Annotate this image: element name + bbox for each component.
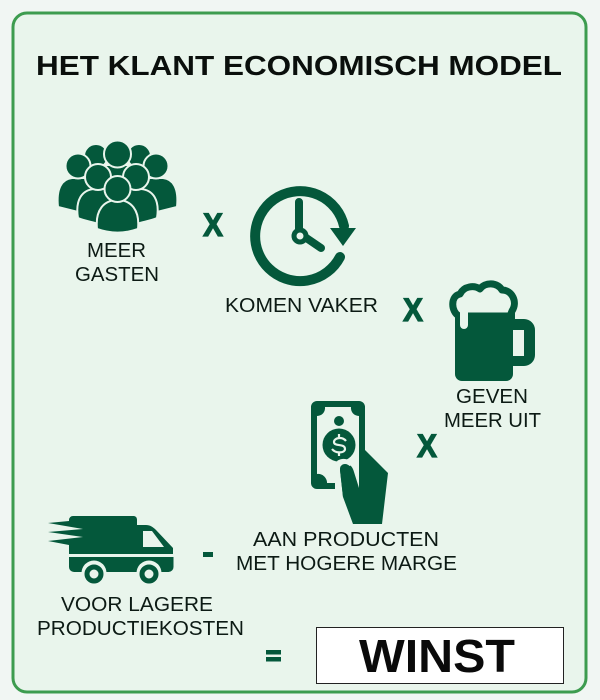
title: HET KLANT ECONOMISCH MODEL [36, 50, 562, 81]
label: aan producten met hogere marge: AAN PRODUCTEN [253, 529, 439, 551]
label: geven meer uit: MEER UIT [444, 410, 541, 432]
icon: beer mug [453, 284, 535, 381]
label: geven meer uit: GEVEN [456, 386, 528, 408]
operator: equals [266, 650, 281, 662]
label: meer gasten [75, 240, 159, 286]
operator: times 1: X [203, 207, 224, 243]
icon: clock with arrow [255, 191, 356, 281]
label: aan producten met hogere marge [236, 529, 457, 575]
label: voor lagere productiekosten: PRODUCTIEKOSTEN [37, 618, 244, 640]
operator: times 3: X [417, 428, 438, 464]
icon: hand holding money [311, 401, 388, 524]
label: meer gasten: GASTEN [75, 264, 159, 286]
operator: times 2: X [403, 292, 424, 328]
operator: minus [203, 552, 213, 557]
label: voor lagere productiekosten: VOOR LAGERE [61, 594, 213, 616]
icon: group of guests [58, 140, 177, 233]
label: meer gasten: MEER [87, 240, 146, 262]
result box: winst [316, 628, 564, 684]
icon: delivery van [48, 516, 174, 586]
label: aan producten met hogere marge: MET HOGERE MARGE [236, 553, 457, 575]
label: geven meer uit [444, 386, 541, 432]
result box: winst: WINST [359, 630, 515, 682]
label: voor lagere productiekosten [37, 594, 244, 640]
label: komen vaker: KOMEN VAKER [225, 295, 378, 317]
